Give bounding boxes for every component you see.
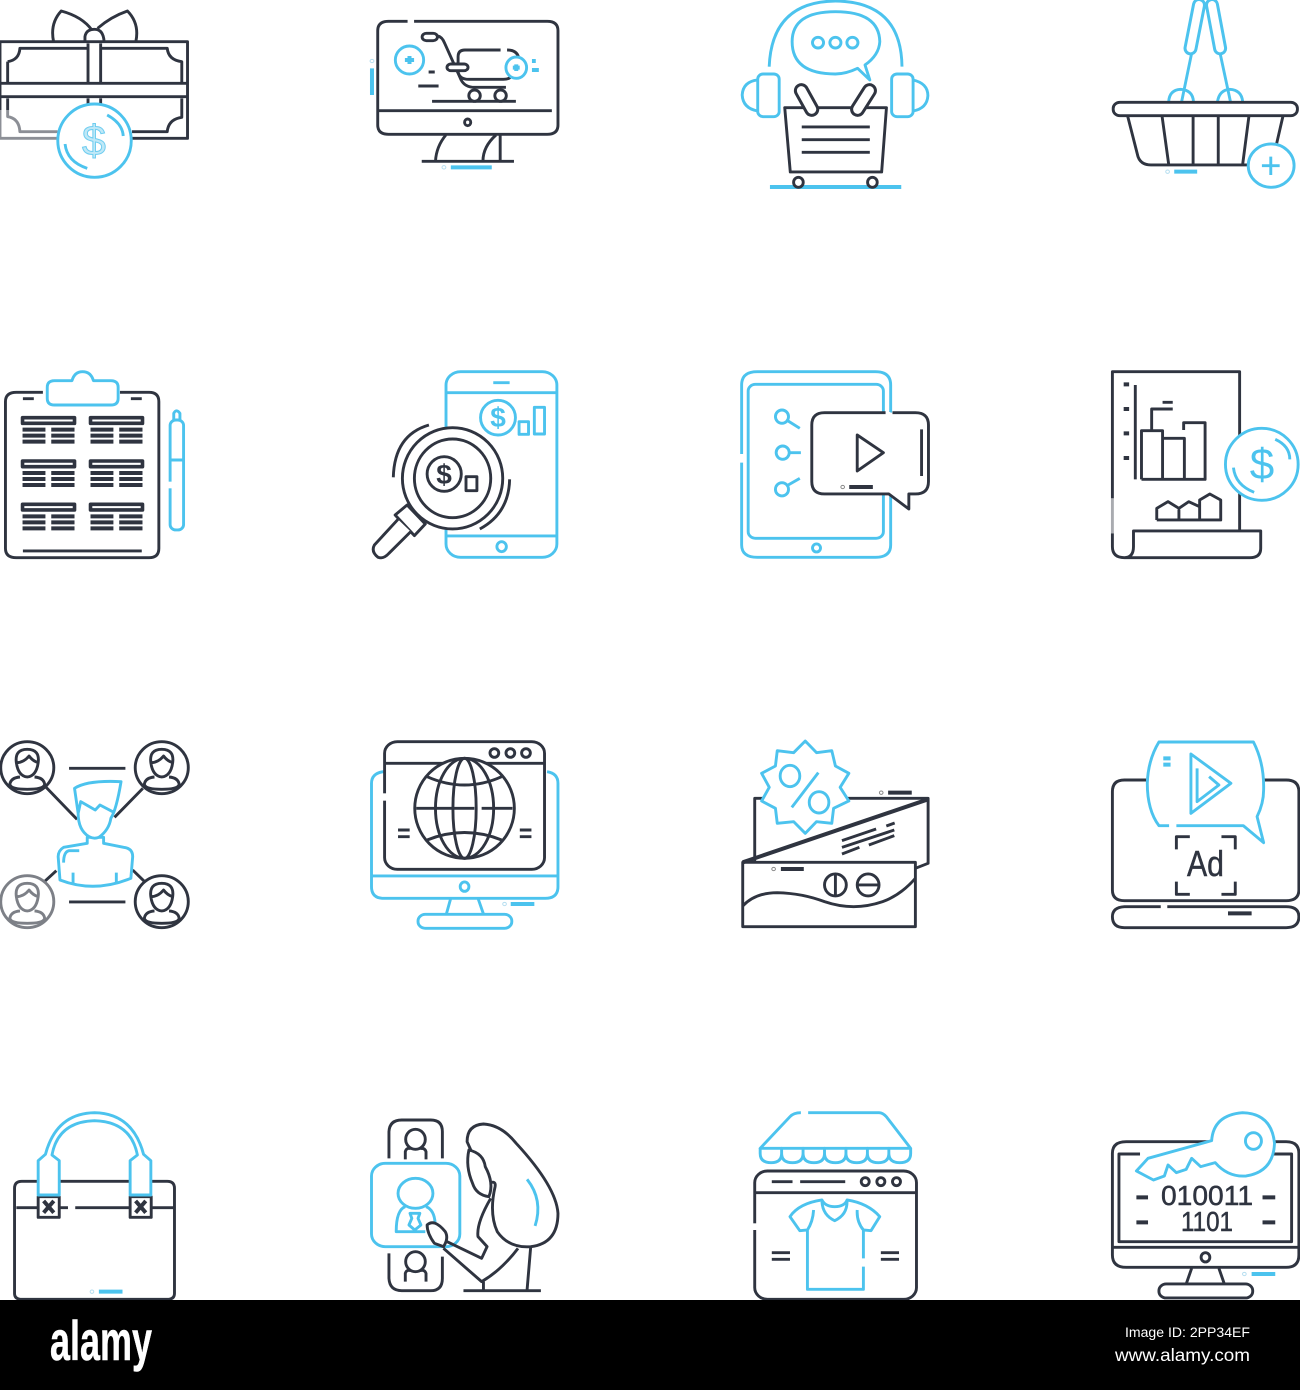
icon: laptop with video ad bbox=[1112, 742, 1299, 928]
icon: chart document with dollar coin bbox=[1112, 372, 1298, 558]
icon: gift banknote with dollar coin: $ bbox=[82, 117, 106, 165]
icon: phone with magnifier and dollar: $ bbox=[490, 402, 506, 433]
icon: people network bbox=[1, 742, 188, 928]
icon: laptop with video ad: Ad bbox=[1187, 843, 1224, 884]
icon: gift banknote with dollar coin bbox=[0, 11, 188, 177]
watermark footer band: alamy bbox=[50, 1309, 152, 1372]
icon: chart document with dollar coin: $ bbox=[1250, 440, 1274, 489]
icon: shopping bag bbox=[15, 1113, 174, 1299]
icon: phone with magnifier and dollar: $ bbox=[436, 459, 452, 490]
watermark footer band: Image ID: 2PP34EF bbox=[1125, 1325, 1250, 1340]
icon: monitor with globe bbox=[371, 742, 558, 928]
icon: discount badge with coupons bbox=[743, 741, 928, 927]
icon: monitor with digital key: 010011 bbox=[1161, 1180, 1253, 1211]
watermark footer band: www.alamy.com bbox=[1114, 1345, 1250, 1365]
icon: online clothing store bbox=[755, 1113, 916, 1299]
icon: woman choosing candidate profile bbox=[371, 1120, 558, 1291]
icon: basket with plus badge bbox=[1113, 5, 1297, 187]
icon: clipboard with pen bbox=[5, 372, 184, 558]
icon: monitor with digital key bbox=[1112, 1113, 1299, 1298]
watermark footer band bbox=[0, 1300, 1300, 1390]
icon: headset with chat bubble and basket bbox=[742, 1, 928, 187]
icon: monitor with shopping cart bbox=[370, 21, 558, 169]
icon: tablet with video bubble bbox=[742, 372, 928, 557]
icon: phone with magnifier and dollar bbox=[373, 372, 557, 558]
icon: monitor with digital key: 1101 bbox=[1181, 1206, 1233, 1237]
